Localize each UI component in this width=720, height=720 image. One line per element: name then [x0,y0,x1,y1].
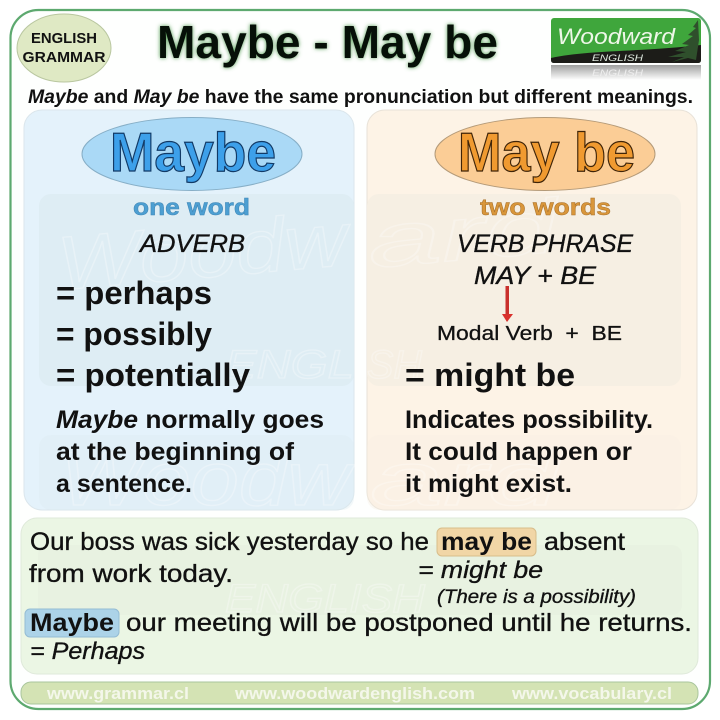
heading: Maybe: Maybe [110,121,276,183]
watermark: bottom: ENGLISH [225,577,425,621]
formula: may + be: MAY + BE [474,262,596,290]
example 2: Maybe [30,609,114,637]
synonym: might be: = might be [405,357,575,393]
watermark: right: SH [367,343,422,387]
arrow [502,286,513,322]
example 1: absent [544,528,625,556]
label: adverb: ADVERB [138,230,245,258]
logo: Woodward English: Woodward [557,24,676,49]
usage note: a sentence. [56,470,192,498]
gloss: might be: = might be [418,557,543,584]
badge: English Grammar: GRAMMAR [22,49,106,66]
label: two words: two words [480,194,611,220]
synonyms: = potentially [56,357,250,393]
meaning note [405,406,653,498]
title: Maybe - May be [157,16,498,68]
panel: Maybe [24,110,355,522]
watermark: left: Woodw [54,197,355,307]
tint band [38,545,682,615]
highlight: Maybe [25,609,119,637]
logo: Woodward English [551,18,701,80]
panel tint band [367,194,681,386]
gloss: possibility: (There is a possibility) [437,587,636,608]
watermark: left: Woodw [60,437,355,522]
synonyms [56,275,250,393]
highlight: may be [437,528,536,556]
usage note: at the beginning of [56,438,295,466]
label: verb phrase: VERB PHRASE [457,230,633,258]
watermark: right: ard [370,437,565,522]
example 2: our meeting will be postponed until he returns. [126,609,692,637]
oval: Maybe [82,118,302,190]
watermark: right [364,183,565,522]
synonyms: = possibly [56,316,212,352]
footer links [46,684,672,703]
fern [668,20,699,62]
gloss: perhaps: = Perhaps [30,638,145,665]
oval: May be [435,118,655,190]
meaning note: it might exist. [405,470,572,498]
subtitle: Maybe and May be have the same pronunciation but different meanings. [28,87,693,108]
panel: May be [364,110,697,522]
watermark: right: ard [364,183,565,285]
logo: Woodward English: ENGLISH [592,68,643,79]
badge: English Grammar [17,14,111,82]
label: one word: one word [133,194,250,220]
usage note [56,406,324,498]
usage note: Maybe normally goes [56,406,324,434]
example 1: from work today. [29,560,233,588]
heading: May be: May be [458,121,635,183]
meaning note: Indicates possibility. [405,406,653,434]
synonyms: = perhaps [56,275,212,311]
example 1: Our boss was sick yesterday so he [30,528,429,556]
logo: Woodward English: ENGLISH [592,53,643,64]
footer links: www.woodwardenglish.com [234,684,475,703]
formula: modal verb + be: Modal Verb + BE [437,323,622,345]
panel tint band [39,194,354,386]
footer bar [21,682,698,704]
watermark: left [54,197,355,522]
meaning note: It could happen or [405,438,632,466]
example 1 [29,528,625,588]
footer links: www.grammar.cl [46,684,189,703]
badge: English Grammar: ENGLISH [31,30,97,47]
panel: examples [21,518,698,674]
footer links: www.vocabulary.cl [511,684,672,703]
title: Maybe - May be [157,16,498,68]
example 1: may be [441,528,532,556]
watermark: left: ENGL [225,343,354,387]
